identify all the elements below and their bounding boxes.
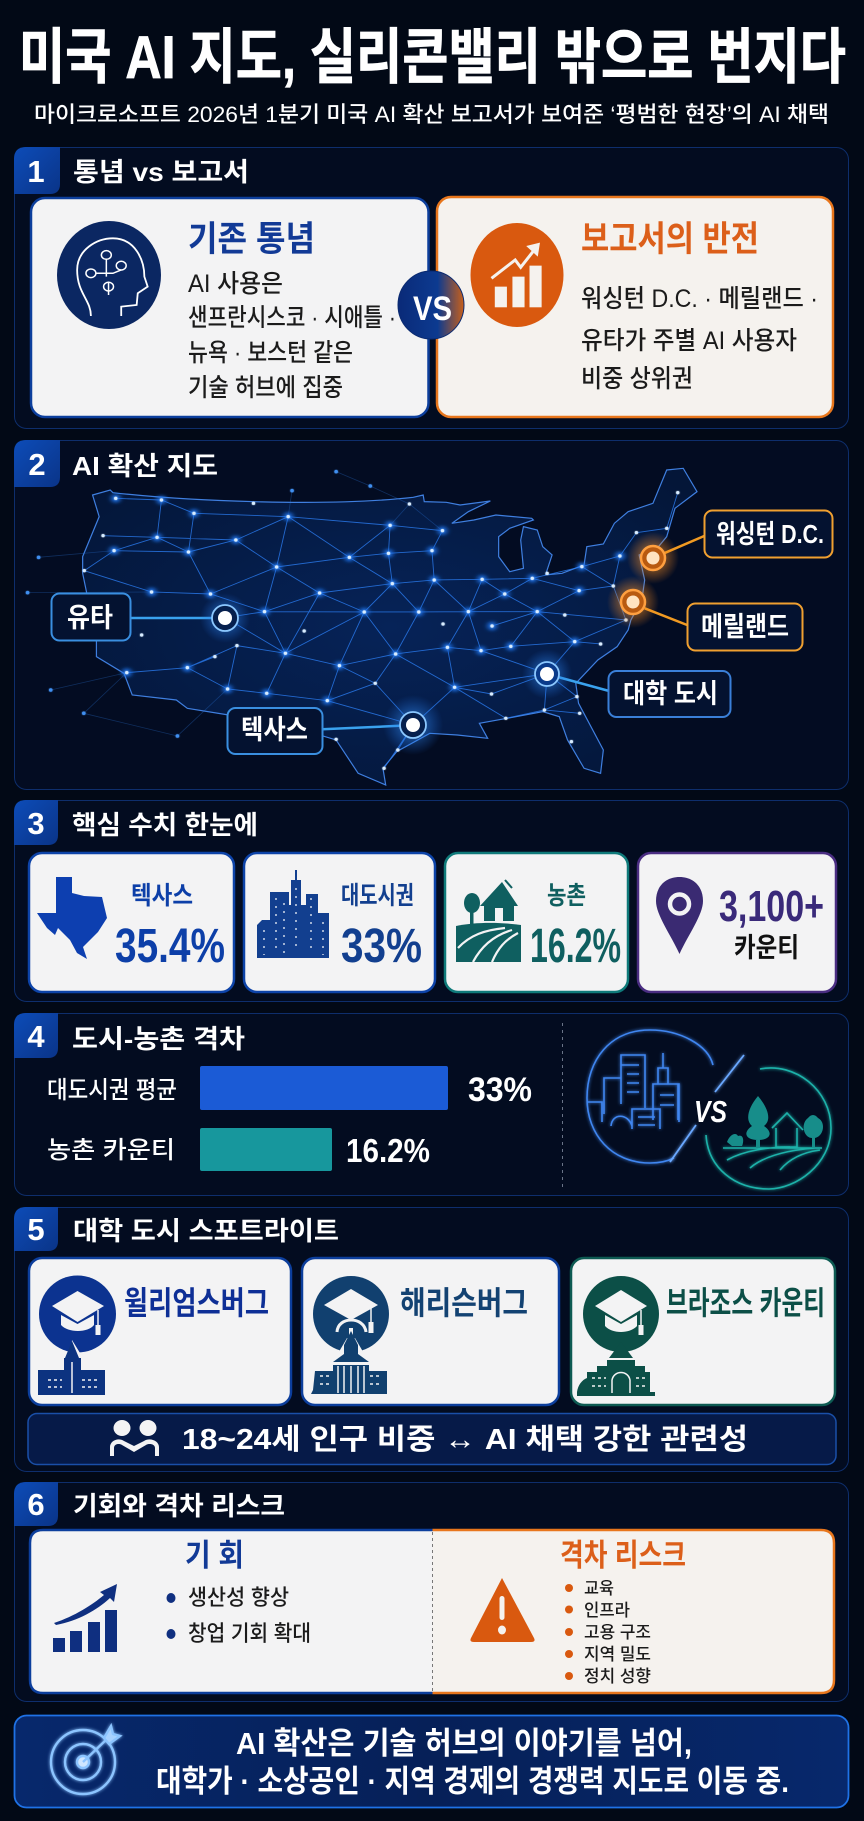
stat value: 35.4%	[115, 920, 225, 973]
heading 3: 핵심 수치 한눈에	[72, 810, 258, 840]
section badge 1	[14, 147, 60, 194]
half: 격차 리스크	[432, 1530, 834, 1693]
icon: farm circle	[706, 1068, 831, 1189]
city name: 해리슨버그	[400, 1285, 528, 1321]
section badge 5: 5	[27, 1212, 45, 1247]
bar row: 대도시권 평균: 대도시권 평균	[47, 1077, 177, 1104]
icon: city skyline	[257, 870, 329, 958]
list: 리스크: 교육	[584, 1579, 614, 1598]
label: 메릴랜드	[688, 604, 802, 650]
stat value: 16.2%	[530, 920, 621, 973]
section badge 4: 4	[27, 1019, 45, 1054]
list: 리스크: 고용 구조	[584, 1623, 651, 1642]
panel: 2 AI 확산 지도	[14, 440, 848, 790]
card body: 샌프란시스코 · 시애틀 ·	[188, 304, 396, 332]
label: 유타	[52, 594, 130, 640]
pin: 워싱턴 D.C.	[627, 532, 679, 584]
list: 기회: 생산성 향상	[188, 1585, 289, 1610]
stat value: 33%	[341, 920, 422, 973]
icon: warning	[470, 1578, 535, 1642]
stat label: 농촌	[547, 882, 586, 910]
section badge 2	[14, 440, 60, 487]
icon: rising bars	[53, 1584, 117, 1652]
vs badge: VS	[413, 290, 452, 328]
card body: 기술 허브에 집중	[188, 374, 343, 402]
divider slash	[670, 1055, 744, 1162]
label: 텍사스	[228, 708, 322, 754]
card: 윌리엄스버그	[29, 1258, 291, 1405]
card: 기존 통념	[31, 198, 428, 417]
icon: location pin	[656, 877, 703, 954]
card title: 보고서의 반전	[581, 220, 759, 259]
card body: 비중 상위권	[581, 365, 693, 393]
half title: 격차 리스크	[560, 1538, 686, 1573]
section badge 4	[14, 1013, 58, 1058]
list: 리스크: 지역 밀도	[584, 1645, 651, 1664]
bar row: 농촌 카운티: 16.2%	[346, 1132, 430, 1169]
pin: 대학 도시	[522, 649, 572, 699]
stat value: 3,100+	[719, 882, 824, 931]
card body	[581, 285, 818, 393]
panel: 4 도시-농촌 격차	[14, 1013, 848, 1196]
card body: 뉴욕 · 보스턴 같은	[188, 339, 353, 367]
panel: 3 핵심 수치 한눈에	[14, 800, 848, 1002]
icon: target	[51, 1726, 120, 1794]
icon: brain head	[57, 221, 161, 329]
section badge 6: 6	[27, 1487, 45, 1522]
stat card: 카운티	[638, 853, 836, 992]
icon: cap and capitol	[311, 1276, 390, 1396]
heading 1: 통념 vs 보고서	[73, 157, 249, 187]
label: 대학 도시: 대학 도시	[623, 679, 718, 709]
stat label: 텍사스	[131, 882, 193, 910]
list: 기회: 창업 기회 확대	[188, 1621, 311, 1646]
vs badge	[398, 271, 464, 339]
correlation bar	[28, 1414, 836, 1464]
city name: 윌리엄스버그	[124, 1285, 269, 1321]
callout text: 대학가 · 소상공인 · 지역 경제의 경쟁력 지도로 이동 중.	[156, 1764, 789, 1799]
list: 리스크: 인프라	[584, 1601, 630, 1620]
label: 텍사스: 텍사스	[241, 715, 308, 745]
icon: Texas	[37, 877, 107, 959]
callout text: AI 확산은 기술 허브의 이야기를 넘어,	[236, 1726, 692, 1761]
stat card: 대도시권	[244, 853, 435, 992]
icon: growth chart	[470, 223, 564, 327]
bar row: 농촌 카운티: 농촌 카운티	[47, 1137, 175, 1164]
list: 리스크	[565, 1579, 651, 1686]
bar row: 대도시권 평균: 33%	[468, 1071, 532, 1109]
section badge 1: 1	[27, 154, 45, 189]
pin: 메릴랜드	[607, 576, 659, 628]
bar row: 대도시권 평균	[47, 1066, 532, 1110]
section badge 3: 3	[27, 806, 45, 841]
footer callout	[14, 1716, 848, 1808]
stat label: 카운티	[734, 933, 799, 963]
card body: 유타가 주별 AI 사용자	[581, 327, 797, 355]
panel: 6 기회와 격차 리스크	[14, 1482, 848, 1702]
icon: city vs farm: VS	[694, 1094, 727, 1129]
pin: 유타	[200, 593, 250, 643]
icon: people	[110, 1420, 159, 1456]
card body	[188, 270, 396, 402]
heading 4: 도시-농촌 격차	[72, 1024, 245, 1054]
heading 5: 대학 도시 스포트라이트	[73, 1216, 339, 1246]
stat card: 농촌	[445, 853, 628, 992]
section badge 2: 2	[28, 447, 46, 482]
panel: 1 통념 vs 보고서	[14, 147, 848, 428]
list: 리스크: 정치 성향	[584, 1667, 651, 1686]
card: 브라조스 카운티	[571, 1258, 835, 1405]
card body: AI 사용은	[188, 270, 283, 298]
pin: 텍사스	[383, 695, 443, 755]
panel: 5 대학 도시 스포트라이트	[14, 1207, 848, 1472]
icon: cap and tower	[38, 1276, 116, 1396]
icon: farm	[456, 880, 521, 962]
stat label: 대도시권	[341, 882, 414, 910]
heading 6: 기회와 격차 리스크	[73, 1491, 285, 1521]
label: 워싱턴 D.C.: 워싱턴 D.C.	[716, 519, 824, 549]
correlation text: 18~24세 인구 비중 ↔ AI 채택 강한 관련성	[182, 1423, 748, 1456]
callout text	[156, 1726, 789, 1799]
label: 메릴랜드: 메릴랜드	[701, 612, 789, 642]
bar chart	[47, 1066, 532, 1171]
icon: city vs farm	[587, 1030, 831, 1189]
comparison card	[30, 1530, 834, 1693]
icon: cap and dome	[577, 1276, 659, 1396]
subtitle: 마이크로소프트 2026년 1분기 미국 AI 확산 보고서가 보여준 ‘평범한 현장’의 AI 채택	[34, 102, 829, 127]
stat card: 텍사스	[29, 853, 234, 992]
half title: 기 회	[185, 1538, 244, 1573]
card: 보고서의 반전	[437, 197, 833, 417]
bar row: 농촌 카운티	[47, 1128, 430, 1171]
map: US network	[28, 468, 833, 785]
half: 기회	[30, 1530, 432, 1693]
list: 기회	[166, 1585, 311, 1646]
icon: city circle	[587, 1030, 713, 1163]
label: 워싱턴 D.C.	[704, 510, 832, 558]
heading 2: AI 확산 지도	[72, 451, 218, 481]
section badge 3	[14, 800, 58, 845]
label: 유타: 유타	[67, 603, 113, 633]
card: 해리슨버그	[302, 1258, 559, 1405]
card title: 기존 통념	[188, 220, 315, 259]
label: 대학 도시	[608, 671, 730, 717]
section badge 6	[14, 1482, 58, 1526]
section badge 5	[14, 1207, 58, 1251]
card body: 워싱턴 D.C. · 메릴랜드 ·	[581, 285, 818, 313]
